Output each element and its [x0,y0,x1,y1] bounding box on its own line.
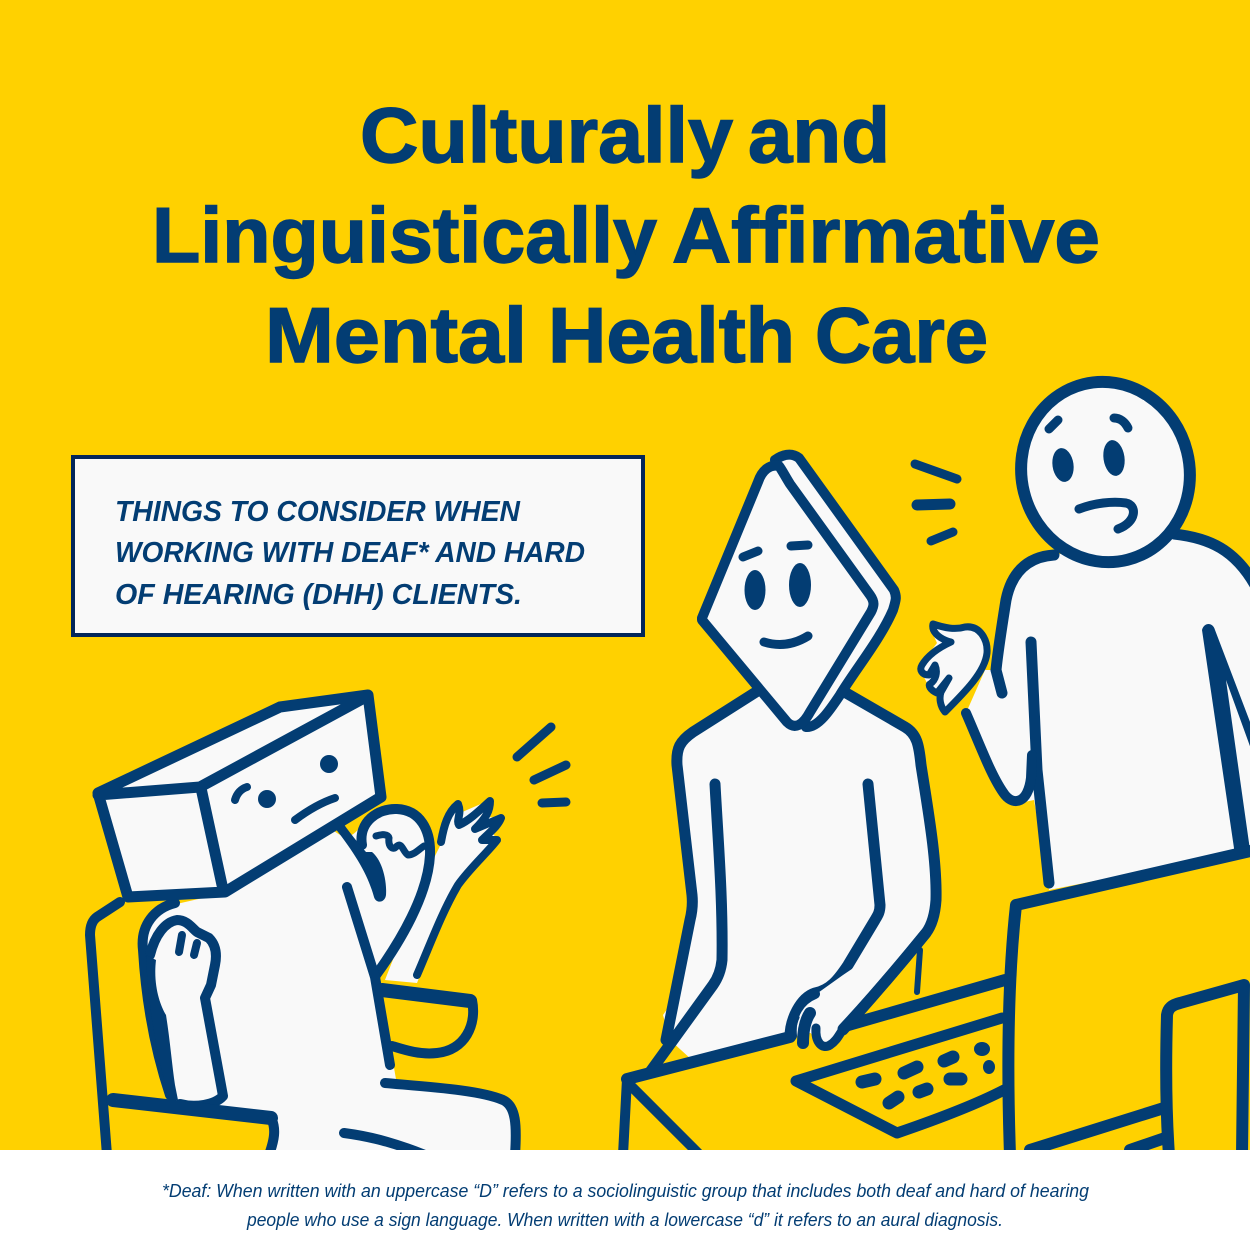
body [140,809,518,1150]
shoulder shadow [335,823,386,902]
title: Mental [265,291,527,379]
forearm and raised hand [385,800,502,983]
footnote: *Deaf: When written with an uppercase “D” refers to a sociolinguistic group that includes both deaf and hard of hearing [162,1181,1089,1201]
sleeve wrinkle [376,835,424,855]
figure: person with diamond head [650,455,957,1072]
footnote: people who use a sign language. When written with a lowercase “d” it refers to an aural diagnosis. [246,1210,1003,1230]
callout: things to consider: OF HEARING (DHH) CLIENTS. [115,579,522,611]
keyboard [796,1018,1004,1133]
title: Affirmative [672,191,1100,279]
body [663,690,936,1060]
shoulders [996,534,1250,693]
callout: things to consider: THINGS TO CONSIDER WHEN [115,496,521,528]
lowered forearm [966,713,1032,801]
callout: things to consider: WORKING WITH DEAF* AND HARD [115,537,585,569]
pointing hand [919,622,988,713]
title: Care [815,291,988,379]
body back line [143,903,175,1095]
body [966,535,1250,890]
title: Health [548,291,795,379]
lowered arm [148,920,224,1107]
resting hand [792,933,926,1047]
forearm stem [917,950,920,992]
title [152,91,1100,379]
sleeve outline [361,809,430,975]
footnote [162,1181,1089,1230]
knuckle lines [179,935,197,955]
left side outline [650,692,756,1072]
desk and keyboard [623,850,1250,1155]
title: Linguistically [152,191,657,279]
head [702,455,896,727]
leg lines [344,1083,516,1155]
left armrest [112,1100,274,1152]
chair back [90,902,120,1155]
arm lines [1031,642,1049,883]
desk legs [623,1079,700,1155]
right side outline [790,690,936,1037]
face [1049,418,1133,529]
box face [235,755,338,820]
footer band [0,1150,1250,1250]
title: Culturally [360,91,733,179]
torso side line [347,887,390,1065]
face [743,545,811,644]
figure: standing person with round head [919,364,1250,890]
title: and [748,91,890,179]
figure: seated person with box head [90,695,566,1155]
box head [98,695,381,897]
keyboard keys [862,1042,995,1103]
callout: things to consider [73,457,643,635]
motion lines [915,464,957,479]
motion lines [517,727,566,803]
head [1002,364,1209,580]
monitor [1008,850,1250,1155]
desk surface [627,980,1005,1079]
right armrest [382,990,473,1053]
chair on the right [1030,985,1244,1155]
